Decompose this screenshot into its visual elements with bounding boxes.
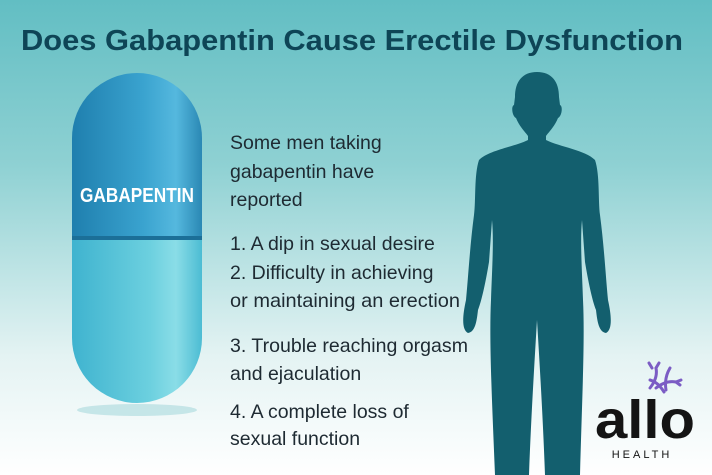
text block: symptoms: sexual function xyxy=(230,428,360,450)
title: Does Gabapentin Cause Erectile Dysfunction xyxy=(21,25,683,57)
logo: allo health xyxy=(595,363,695,461)
text block: symptoms: and ejaculation xyxy=(230,363,361,385)
text block: symptoms: 2. Difficulty in achieving xyxy=(230,262,433,284)
text block: symptoms: 1. A dip in sexual desire xyxy=(230,233,435,255)
logo: allo health: HEALTH xyxy=(612,449,672,461)
icon: capsule xyxy=(72,73,202,416)
text block: symptoms: 4. A complete loss of xyxy=(230,401,409,423)
text block: symptoms: or maintaining an erection xyxy=(230,290,460,312)
text block: symptoms: Some men taking xyxy=(230,132,382,154)
icon: human silhouette xyxy=(463,72,611,475)
text block: symptoms: 3. Trouble reaching orgasm xyxy=(230,335,468,357)
logo: allo health: allo xyxy=(595,390,695,450)
text block: symptoms: reported xyxy=(230,189,303,211)
text block: symptoms xyxy=(230,132,468,450)
text block: symptoms: gabapentin have xyxy=(230,161,374,183)
capsule label: GABAPENTIN xyxy=(80,185,194,207)
